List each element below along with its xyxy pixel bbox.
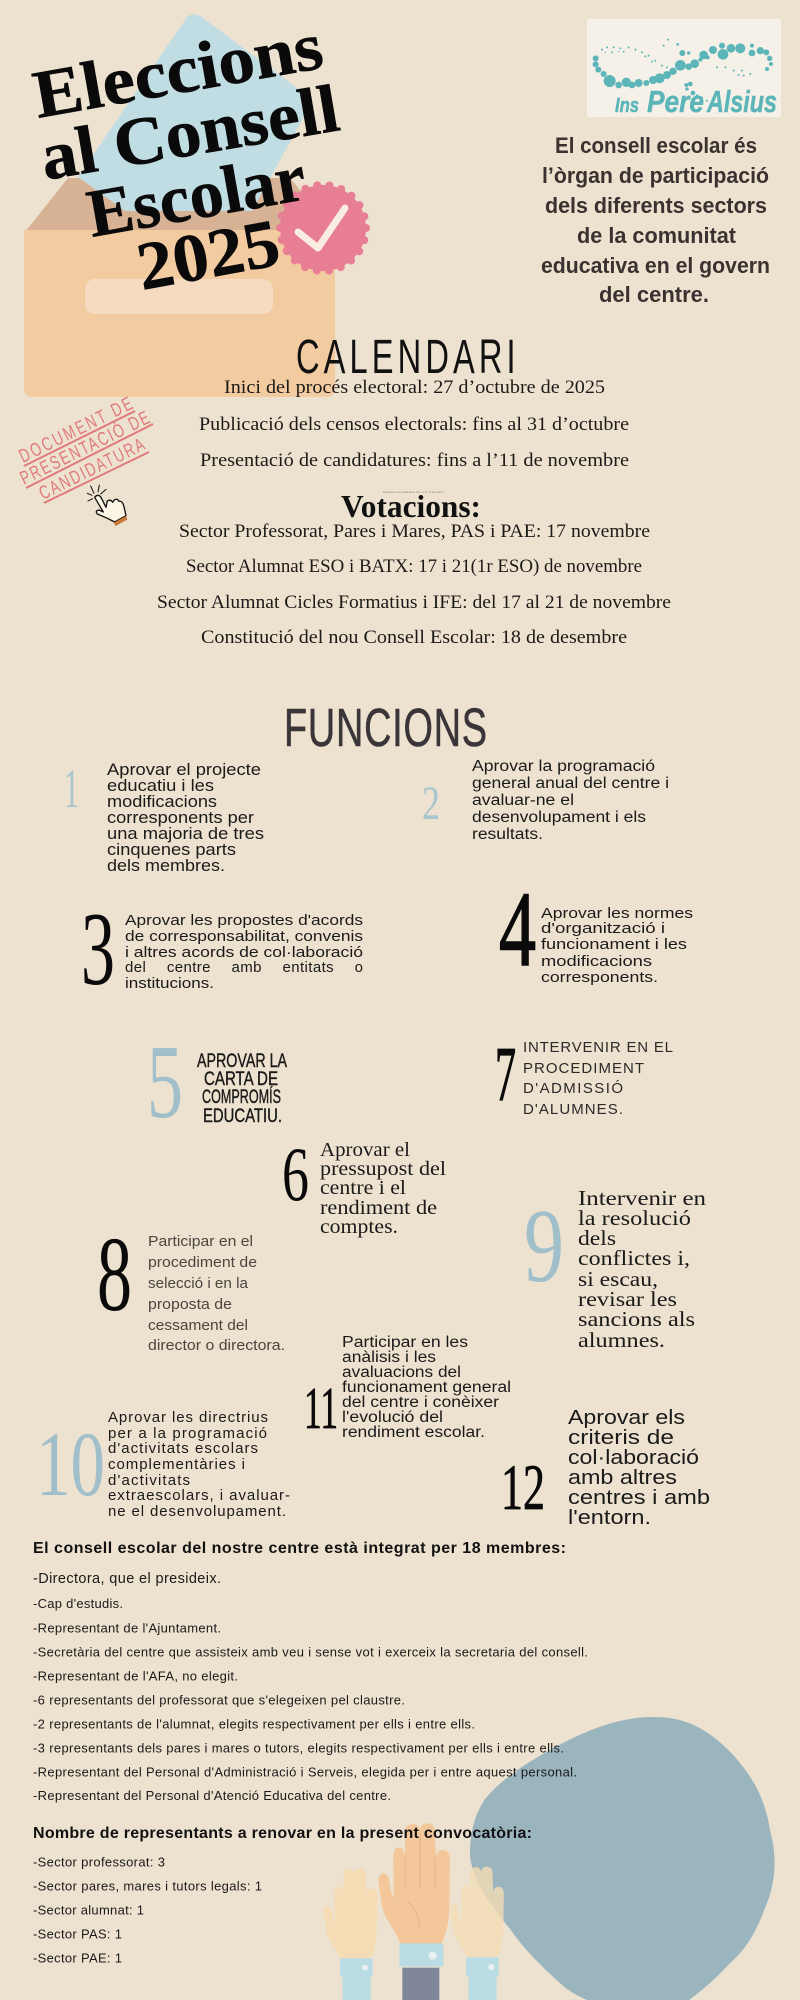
- function 8: [97, 1216, 285, 1354]
- function 5: 5: [147, 1023, 183, 1140]
- logo: Ins Pere Alsius: Ins: [615, 95, 639, 117]
- heading: representatives to renew: Nombre de representants a renovar en la present convocatòria:: [33, 1825, 532, 1842]
- function 8: Participar en el: [148, 1233, 253, 1250]
- calendar dates: Presentació de candidatures fins a l’11 de novembre.: [383, 490, 444, 494]
- function 2: general anual del centre i: [472, 775, 669, 792]
- function 3: de corresponsabilitat, convenis: [125, 928, 363, 945]
- list: sectors: -Sector alumnat: 1: [33, 1902, 144, 1918]
- function 10: Aprovar les directrius: [108, 1409, 268, 1426]
- function 1: una majoria de tres: [107, 825, 264, 843]
- decorative illustration: ballot box: [24, 14, 335, 397]
- function 1: 1: [64, 758, 79, 819]
- heading: Votacions: Votacions:: [341, 488, 481, 524]
- title: [27, 7, 344, 305]
- function 6: 6: [282, 1131, 309, 1217]
- list: sectors: [33, 1854, 262, 1966]
- voting dates: Sector Professorat, Pares i Mares, PAS i PAE: 17 novembre: [179, 521, 650, 542]
- list: sectors: -Sector PAS: 1: [33, 1926, 122, 1942]
- intro text: dels diferents sectors: [545, 193, 767, 218]
- function 9: [524, 1186, 707, 1352]
- function 9: dels: [578, 1226, 616, 1250]
- title: al Consell: [35, 70, 344, 195]
- stamp: document de presentació de candidatura: CANDIDATURA: [35, 433, 148, 504]
- function 5: [147, 1023, 287, 1140]
- function 9: la resolució: [578, 1206, 691, 1230]
- function 4: funcionament i les: [541, 936, 687, 953]
- function 10: d'activitats: [108, 1472, 190, 1489]
- function 6: comptes.: [320, 1216, 398, 1238]
- intro text: educativa en el govern: [541, 253, 770, 278]
- function 8: selecció i en la: [148, 1275, 249, 1292]
- voting dates: [157, 521, 671, 648]
- function 1: dels membres.: [107, 857, 225, 875]
- function 11: 11: [304, 1375, 338, 1441]
- function 3: institucions.: [125, 975, 214, 992]
- function 12: 12: [501, 1452, 545, 1524]
- function 3: del centre amb entitats o: [125, 959, 363, 976]
- function 11: Participar en les: [342, 1334, 468, 1351]
- logo: Ins Pere Alsius: [587, 19, 781, 119]
- function 3: Aprovar les propostes d'acords: [125, 912, 363, 929]
- function 2: desenvolupament i els: [472, 809, 646, 826]
- voting dates: Constitució del nou Consell Escolar: 18 de desembre: [201, 627, 627, 648]
- list: sectors: -Sector professorat: 3: [33, 1854, 165, 1870]
- function 10: ne el desenvolupament.: [108, 1503, 286, 1520]
- function 11: anàlisis i les: [342, 1349, 436, 1366]
- function 1: modificacions: [107, 793, 217, 811]
- function 4: 4: [499, 871, 536, 989]
- function 10: extraescolars, i avaluar-: [108, 1487, 290, 1504]
- function 6: centre i el: [320, 1177, 406, 1199]
- function 10: 10: [36, 1413, 105, 1515]
- list: council members: -Directora, que el presideix.: [33, 1571, 221, 1587]
- function 3: 3: [81, 890, 115, 1007]
- right cuff and sleeve: [466, 1957, 499, 2000]
- calendar dates: Inici del procés electoral: 27 d’octubre de 2025: [224, 377, 605, 398]
- function 4: [499, 871, 693, 989]
- function 6: pressupost del: [320, 1158, 446, 1180]
- intro text: l’òrgan de participació: [542, 163, 769, 188]
- function 11: [304, 1334, 511, 1441]
- function 9: Intervenir en: [578, 1186, 707, 1210]
- left cuff and sleeve: [340, 1958, 373, 2000]
- central hand: [378, 1823, 450, 1943]
- list: council members: -3 representants dels pares i mares o tutors, elegits respectivament per ells i entre ells.: [33, 1740, 564, 1756]
- title: Escolar: [81, 139, 311, 252]
- function 12: centres i amb: [568, 1486, 710, 1509]
- function 2: Aprovar la programació: [472, 758, 655, 775]
- function 6: Aprovar el: [320, 1139, 410, 1161]
- function 9: si escau,: [578, 1267, 658, 1291]
- list: council members: -2 representants de l'alumnat, elegits respectivament per ells i entre ells.: [33, 1716, 475, 1732]
- function 12: Aprovar els: [568, 1406, 685, 1429]
- function 5: APROVAR LA: [197, 1051, 287, 1072]
- function 5: COMPROMÍS: [202, 1087, 281, 1108]
- function 11: rendiment escolar.: [342, 1424, 485, 1441]
- intro text: de la comunitat: [577, 223, 737, 248]
- function 8: director o directora.: [148, 1337, 285, 1354]
- function 10: per a la programació: [108, 1425, 267, 1442]
- decorative blue blob: [470, 1717, 775, 2000]
- function 1: Aprovar el projecte: [107, 761, 261, 779]
- calendar dates: Publicació dels censos electorals: fins al 31 d’octubre: [199, 414, 629, 435]
- function 1: cinquenes parts: [107, 841, 236, 859]
- function 9: revisar les: [578, 1287, 677, 1311]
- function 7: PROCEDIMENT: [523, 1060, 644, 1077]
- function 9: conflictes i,: [578, 1246, 690, 1270]
- function 9: 9: [524, 1187, 564, 1304]
- function 1: educatiu i les: [107, 777, 214, 795]
- list: council members: [33, 1571, 588, 1803]
- list: council members: -6 representants del professorat que s'elegeixen pel claustre.: [33, 1692, 405, 1708]
- function 12: l'entorn.: [568, 1506, 651, 1529]
- function 10: complementàries i: [108, 1456, 245, 1473]
- function 8: cessament del: [148, 1317, 248, 1334]
- list: council members: -Representant de l'AFA, no elegit.: [33, 1668, 238, 1684]
- function 10: [36, 1409, 290, 1520]
- intro text: del centre.: [599, 282, 709, 307]
- function 5: EDUCATIU.: [203, 1106, 282, 1127]
- stamp: document de presentació de candidatura: DOCUMENT DE: [15, 393, 136, 467]
- logo: Ins Pere Alsius: Pere: [647, 84, 704, 119]
- function 12: [501, 1406, 710, 1529]
- intro text: El consell escolar és: [555, 133, 757, 158]
- function 2: [422, 758, 669, 843]
- title: 2025: [131, 204, 285, 305]
- calendar dates: [199, 377, 629, 494]
- calendar dates: Presentació de candidatures: fins a l’11 de novembre: [200, 450, 629, 471]
- logo: Ins Pere Alsius: Alsius: [706, 84, 777, 119]
- function 12: criteris de: [568, 1426, 674, 1449]
- function 12: amb altres: [568, 1466, 677, 1489]
- intro text: [541, 133, 770, 307]
- heading: Funcions: FUNCIONS: [284, 697, 487, 758]
- list: council members: -Cap d'estudis.: [33, 1596, 123, 1611]
- heading: Calendari: CALENDARI: [296, 330, 516, 384]
- function 1: corresponents per: [107, 809, 255, 827]
- list: council members: -Representant del Personal d'Atenció Educativa del centre.: [33, 1788, 391, 1803]
- function 8: procediment de: [148, 1254, 257, 1271]
- function 4: corresponents.: [541, 969, 658, 986]
- list: council members: -Secretària del centre que assisteix amb veu i sense vot i exerceix la secretaria del consell.: [33, 1644, 588, 1660]
- left hand: [323, 1868, 377, 1958]
- list: council members: -Representant del Personal d'Administració i Serveis, elegida per i entre aquest personal.: [33, 1764, 577, 1780]
- function 4: modificacions: [541, 953, 652, 970]
- heading: council composition: El consell escolar del nostre centre està integrat per 18 membres:: [33, 1540, 566, 1557]
- voting dates: Sector Alumnat ESO i BATX: 17 i 21(1r ESO) de novembre: [186, 556, 642, 577]
- function 12: col·laboració: [568, 1446, 699, 1469]
- function 2: 2: [422, 777, 440, 830]
- function 11: l'evolució del: [342, 1409, 443, 1426]
- function 4: Aprovar les normes: [541, 905, 693, 922]
- function 11: del centre i conèixer: [342, 1394, 499, 1411]
- function 7: INTERVENIR EN EL: [523, 1039, 673, 1056]
- function 7: D'ADMISSIÓ: [523, 1080, 623, 1097]
- function 3: [81, 890, 363, 1007]
- function 3: i altres acords de col·laboració: [125, 944, 363, 961]
- function 8: 8: [97, 1216, 132, 1334]
- function 7: [495, 1031, 673, 1118]
- function 10: d'activitats escolars: [108, 1440, 258, 1457]
- function 7: D'ALUMNES.: [523, 1101, 623, 1118]
- title: Eleccions: [27, 7, 328, 133]
- icon: pointing hand cursor: [87, 485, 127, 526]
- illustration: raised hands: [323, 1823, 504, 2000]
- list: sectors: -Sector PAE: 1: [33, 1950, 122, 1966]
- function 6: rendiment de: [320, 1197, 437, 1219]
- list: sectors: -Sector pares, mares i tutors legals: 1: [33, 1878, 262, 1894]
- icon: check badge: [280, 185, 366, 271]
- voting dates: Sector Alumnat Cicles Formatius i IFE: del 17 al 21 de novembre: [157, 592, 671, 613]
- function 7: 7: [495, 1031, 516, 1117]
- function 9: alumnes.: [578, 1328, 665, 1352]
- list: council members: -Representant de l'Ajuntament.: [33, 1620, 221, 1636]
- right hand: [450, 1867, 504, 1957]
- function 11: avaluacions del: [342, 1364, 461, 1381]
- function 4: d'organització i: [541, 920, 665, 937]
- function 1: [64, 758, 264, 875]
- central cuff and sleeve: [399, 1943, 443, 2000]
- function 6: [282, 1131, 446, 1238]
- function 2: resultats.: [472, 826, 543, 843]
- function 8: proposta de: [148, 1296, 232, 1313]
- function 5: CARTA DE: [204, 1069, 278, 1090]
- function 11: funcionament general: [342, 1379, 511, 1396]
- stamp: document de presentació de candidatura: PRESENTACIÓ DE: [16, 407, 153, 489]
- function 9: sancions als: [578, 1307, 695, 1331]
- function 2: avaluar-ne el: [472, 792, 574, 809]
